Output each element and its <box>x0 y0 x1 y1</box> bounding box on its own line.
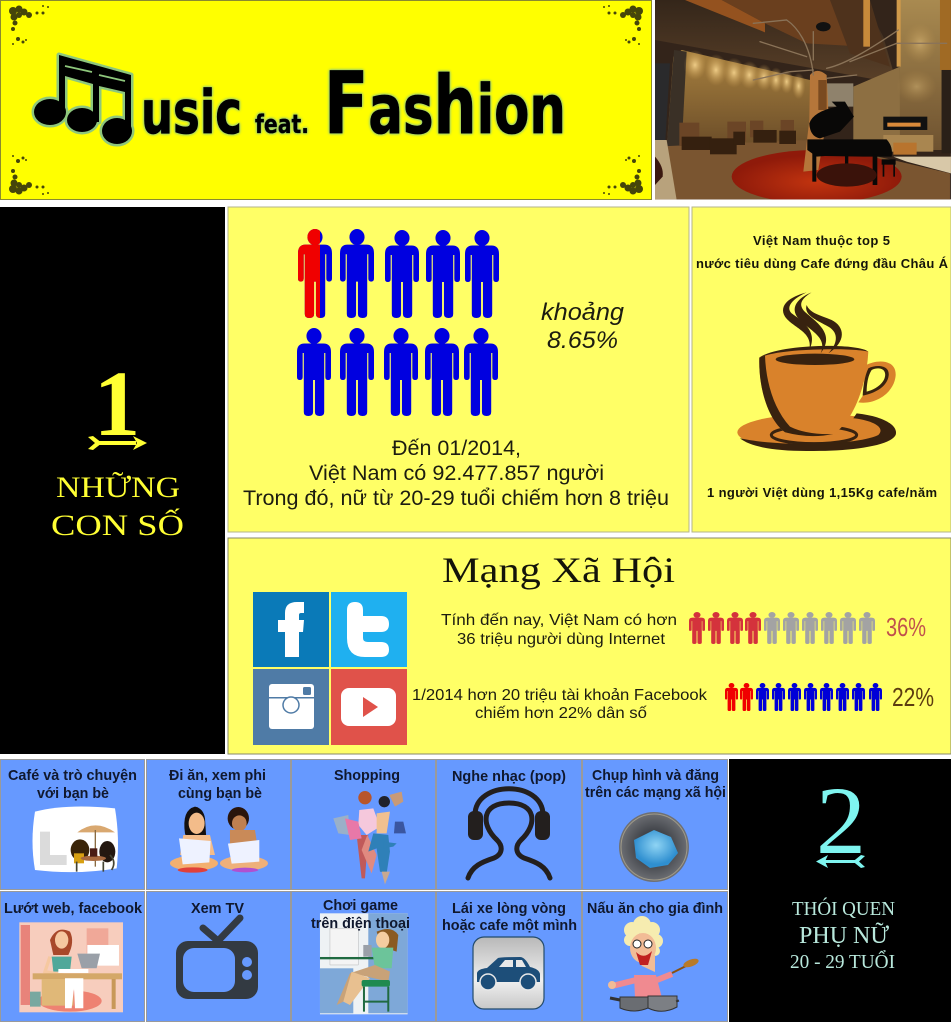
logo: text: feat. <box>255 110 309 140</box>
heading: habits of women: THÓI QUEN <box>792 896 895 920</box>
heading: Những con số: CON SỐ <box>51 508 184 542</box>
text: facebook accounts: chiếm hơn 22% dân số <box>475 705 647 722</box>
habit: listening to pop music: Nghe nhạc (pop) <box>452 768 566 785</box>
panel: header banner <box>0 0 652 200</box>
panel: coffee <box>692 207 951 532</box>
callout: percentage <box>541 299 625 354</box>
heading: Những con số: NHỮNG <box>56 471 180 504</box>
number 1: 1 <box>94 353 140 456</box>
number 2: 2 <box>816 767 866 874</box>
heading: Mạng Xã Hội <box>442 550 675 590</box>
habit: taking photos: Chụp hình và đăng <box>592 767 719 784</box>
callout: percentage: 8.65% <box>547 327 618 354</box>
text: facebook accounts <box>412 687 708 722</box>
panel: section 1 black sidebar <box>0 207 225 754</box>
habit: driving around: Lái xe lòng vòng <box>452 900 566 917</box>
text block: population: Việt Nam có 92.477.857 người <box>309 462 604 485</box>
icon: facebook <box>253 592 329 667</box>
pictogram: 36 percent <box>689 612 875 644</box>
panel: section 2 black sidebar <box>729 759 951 1022</box>
logo: music notes <box>34 55 132 144</box>
habit: browsing web <box>4 900 143 1012</box>
heading: habits of women <box>790 896 895 973</box>
habit: cooking: Nấu ăn cho gia đình <box>587 900 723 917</box>
logo: text <box>141 54 566 154</box>
text: internet users: 36 triệu người dùng Internet <box>457 631 666 648</box>
habit: driving around: hoặc cafe một mình <box>442 917 577 934</box>
callout: percentage: khoảng <box>541 299 625 326</box>
text: internet users <box>441 612 677 648</box>
habit: cooking <box>587 900 723 1011</box>
habit: browsing web: Lướt web, facebook <box>4 900 143 917</box>
pictogram: ten people, one part red <box>297 229 499 416</box>
heading: Những con số <box>51 471 184 542</box>
habit: shopping <box>333 767 406 884</box>
icon: instagram <box>253 669 329 745</box>
text: internet users: Tính đến nay, Việt Nam có hơn <box>441 612 677 629</box>
text block: population <box>243 437 669 510</box>
habit: mobile games: Chơi game <box>323 897 398 914</box>
photo: lounge with piano <box>655 0 951 203</box>
value: 36 percent: 36% <box>886 612 926 642</box>
habit: dining and movies: cùng bạn bè <box>178 785 262 802</box>
text block: population: Đến 01/2014, <box>392 437 521 460</box>
panel: habit grid <box>0 760 728 1022</box>
habit: mobile games: trên điện thoại <box>311 915 410 932</box>
logo: text: usic <box>141 78 242 148</box>
habit: cafe with friends <box>8 767 137 872</box>
logo: text: Fashion <box>324 54 566 154</box>
coffee heading <box>696 233 949 271</box>
corner ornaments <box>9 5 643 195</box>
habit: dining and movies: Đi ăn, xem phi <box>169 767 266 784</box>
text block: population: Trong đó, nữ từ 20-29 tuổi chiếm hơn 8 triệu <box>243 487 669 510</box>
habit: taking photos: trên các mạng xã hội <box>585 784 726 801</box>
habit: listening to pop music <box>452 768 566 878</box>
habit: cafe with friends: với bạn bè <box>37 785 109 802</box>
icon: coffee cup <box>737 292 896 451</box>
pictogram: 22 percent <box>725 683 882 711</box>
coffee heading: nước tiêu dùng Cafe đứng đầu Châu Á <box>696 256 949 271</box>
icon: youtube <box>331 669 407 745</box>
habit: watching TV: Xem TV <box>191 900 244 917</box>
habit: watching TV <box>176 900 258 999</box>
arrow <box>88 436 147 450</box>
panel: social networks <box>228 538 951 754</box>
habit: dining and movies <box>169 767 268 873</box>
habit: cafe with friends: Café và trò chuyện <box>8 767 137 784</box>
text: facebook accounts: 1/2014 hơn 20 triệu tài khoản Facebook <box>412 687 708 704</box>
coffee heading: Việt Nam thuộc top 5 <box>753 233 890 248</box>
habit: driving around <box>442 900 577 1009</box>
icon: twitter <box>331 592 407 667</box>
coffee fact: 1 người Việt dùng 1,15Kg cafe/năm <box>707 485 937 500</box>
habit: mobile games <box>311 897 410 1014</box>
habit: taking photos <box>585 767 726 882</box>
heading: habits of women: 20 - 29 TUỔI <box>790 949 895 973</box>
value: 22 percent: 22% <box>892 682 934 712</box>
heading: habits of women: PHỤ NỮ <box>799 922 889 949</box>
panel: population stats <box>228 207 689 532</box>
habit: shopping: Shopping <box>334 767 400 784</box>
arrow <box>816 855 865 868</box>
